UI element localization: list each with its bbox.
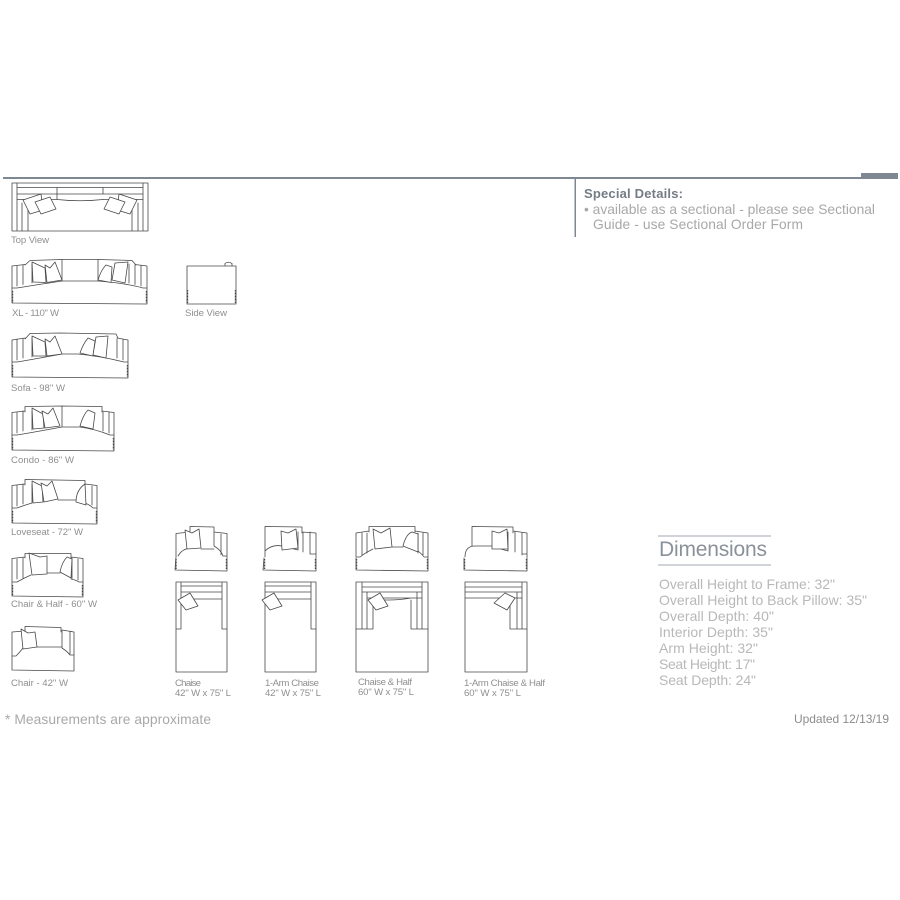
label: chair: Chair - 42" W: [11, 678, 69, 689]
drawing: chaise and half plan: [356, 582, 428, 672]
drawing: side view: [187, 262, 236, 304]
label: chaise: [175, 678, 232, 699]
label: chaise and half: 60" W x 75" L: [358, 687, 415, 698]
heading: special details: Special Details:: [584, 186, 683, 201]
text: dimension list: Seat Height: 17": [659, 656, 755, 672]
label: 1-arm chaise and half: 1-Arm Chaise & Half: [464, 678, 545, 689]
drawing: top view: [12, 183, 148, 231]
label: chaise: Chaise: [175, 678, 201, 689]
panel: dimensions: [658, 536, 867, 688]
label: side view: Side View: [185, 308, 227, 319]
drawing: 1-arm chaise front: [263, 526, 316, 571]
text: dimension list: [659, 576, 867, 688]
drawing: chaise and half front: [356, 526, 428, 571]
text: details: [584, 202, 875, 232]
drawing: chair: [12, 626, 74, 671]
panel: special details: [574, 178, 875, 237]
text: dimension list: Overall Height to Frame: 32": [659, 576, 835, 592]
label: top view: Top View: [11, 235, 49, 246]
drawing: XL sofa: [12, 260, 147, 304]
label: 1-arm chaise: 1-Arm Chaise: [265, 678, 319, 689]
text: dimension list: Arm Height: 32": [659, 640, 758, 656]
label: sofa: Sofa - 98" W: [11, 383, 66, 394]
drawing: chair and half: [12, 553, 83, 597]
text: dimension list: Overall Height to Back Pillow: 35": [659, 592, 867, 608]
label: condo: Condo - 86" W: [11, 455, 75, 466]
label: chaise: 42" W x 75" L: [175, 688, 232, 699]
top rule with tab: [3, 173, 898, 179]
label: chair and half: Chair & Half - 60" W: [11, 599, 98, 610]
heading: dimensions: Dimensions: [659, 538, 767, 561]
drawing: condo: [12, 406, 114, 451]
drawing: chaise plan: [176, 582, 227, 672]
drawing: 1-arm chaise and half plan: [465, 582, 527, 672]
drawing: 1-arm chaise and half front: [464, 526, 527, 571]
text: dimension list: Overall Depth: 40": [659, 608, 774, 624]
drawing: 1-arm chaise plan: [262, 582, 316, 672]
updated date: Updated 12/13/19: [794, 712, 889, 726]
text: details: • available as a sectional - please see Sectional: [584, 202, 875, 217]
drawing: sofa: [12, 333, 128, 378]
text: dimension list: Interior Depth: 35": [659, 624, 773, 640]
label: 1-arm chaise and half: 60" W x 75" L: [464, 688, 522, 699]
footnote: * Measurements are approximate: [5, 712, 211, 727]
label: chaise and half: Chaise & Half: [358, 677, 412, 688]
label: 1-arm chaise and half: [464, 678, 545, 699]
label: loveseat: Loveseat - 72" W: [11, 527, 84, 538]
text: dimension list: Seat Depth: 24": [659, 672, 756, 688]
label: chaise and half: [358, 677, 415, 698]
label: 1-arm chaise: [265, 678, 322, 699]
text: details: Guide - use Sectional Order Form: [593, 217, 803, 232]
label: XL: XL - 110" W: [12, 308, 60, 319]
drawing: loveseat: [12, 480, 97, 524]
drawing: chaise front: [175, 526, 227, 571]
label: 1-arm chaise: 42" W x 75" L: [265, 688, 322, 699]
